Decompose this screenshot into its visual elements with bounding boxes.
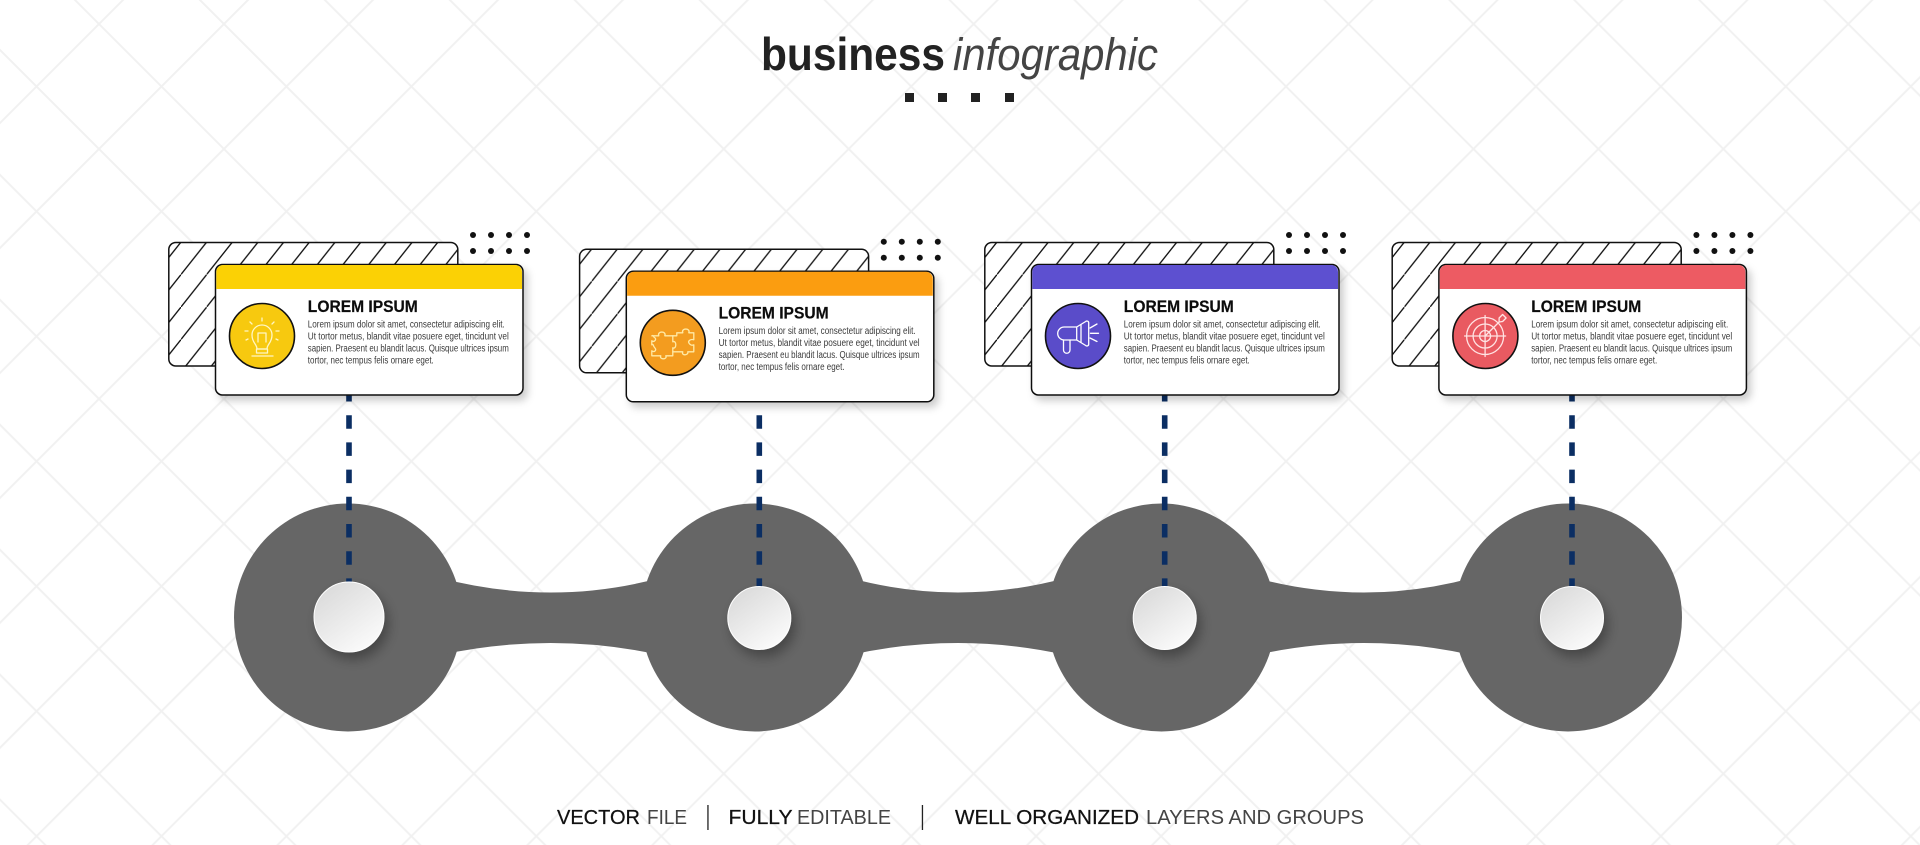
panel: card 4 red: Ut tortor metus, blandit vitae posuere eget, tincidunt vel (1531, 331, 1732, 342)
footer text (557, 805, 1364, 830)
panel: card 4 red: sapien. Praesent eu blandit lacus. Quisque ultrices ipsum (1531, 343, 1732, 354)
panel: card 2 orange (580, 239, 941, 402)
footer text: EDITABLE (797, 806, 891, 829)
panel: card 4 red: tortor, nec tempus felis ornare eget. (1531, 355, 1657, 366)
panel: card 2 orange: LOREM IPSUM (719, 305, 829, 323)
panel: card 1 yellow (169, 232, 530, 395)
title square dots (905, 93, 1014, 102)
panel: card 2 orange: Lorem ipsum dolor sit amet, consectetur adipiscing elit. (719, 326, 916, 337)
panel: card 3 purple: Ut tortor metus, blandit vitae posuere eget, tincidunt vel (1124, 331, 1325, 342)
icon: light bulb (245, 318, 279, 356)
footer text: WELL ORGANIZED (955, 806, 1139, 829)
panel: card 1 yellow: Ut tortor metus, blandit vitae posuere eget, tincidunt vel (308, 331, 509, 342)
panel: card 4 red: Lorem ipsum dolor sit amet, consectetur adipiscing elit. (1531, 319, 1728, 330)
footer text: FILE (647, 806, 687, 829)
dashed connectors (349, 388, 1572, 590)
panel: card 4 red (1392, 232, 1753, 395)
panel: card 1 yellow: sapien. Praesent eu blandit lacus. Quisque ultrices ipsum (308, 343, 509, 354)
panel: card 2 orange: Ut tortor metus, blandit vitae posuere eget, tincidunt vel (719, 338, 920, 349)
timeline track (234, 504, 1682, 732)
title: business (761, 28, 945, 80)
title (761, 28, 1158, 80)
panel: card 3 purple: tortor, nec tempus felis ornare eget. (1124, 355, 1250, 366)
icon: target (1465, 314, 1506, 356)
icon: puzzle pieces (652, 329, 694, 359)
timeline node 4 (1540, 586, 1604, 650)
panel: card 3 purple: Lorem ipsum dolor sit amet, consectetur adipiscing elit. (1124, 319, 1321, 330)
footer text: VECTOR (557, 806, 640, 829)
panel: card 2 orange: sapien. Praesent eu blandit lacus. Quisque ultrices ipsum (719, 350, 920, 361)
footer text: FULLY (728, 806, 793, 829)
icon: megaphone (1058, 321, 1098, 353)
panel: card 1 yellow: LOREM IPSUM (308, 298, 418, 316)
panel: card 3 purple (985, 232, 1346, 395)
title: infographic (953, 29, 1158, 80)
panel: card 3 purple: sapien. Praesent eu blandit lacus. Quisque ultrices ipsum (1124, 343, 1325, 354)
panel: card 4 red: LOREM IPSUM (1531, 298, 1641, 316)
panel: card 1 yellow: tortor, nec tempus felis ornare eget. (308, 355, 434, 366)
panel: card 2 orange: tortor, nec tempus felis ornare eget. (719, 362, 845, 373)
timeline node 1 (314, 582, 384, 652)
panel: card 3 purple: LOREM IPSUM (1124, 298, 1234, 316)
timeline node 2 (728, 586, 791, 650)
timeline node 3 (1133, 586, 1196, 650)
panel: card 1 yellow: Lorem ipsum dolor sit amet, consectetur adipiscing elit. (308, 319, 505, 330)
footer text: LAYERS AND GROUPS (1146, 806, 1364, 829)
